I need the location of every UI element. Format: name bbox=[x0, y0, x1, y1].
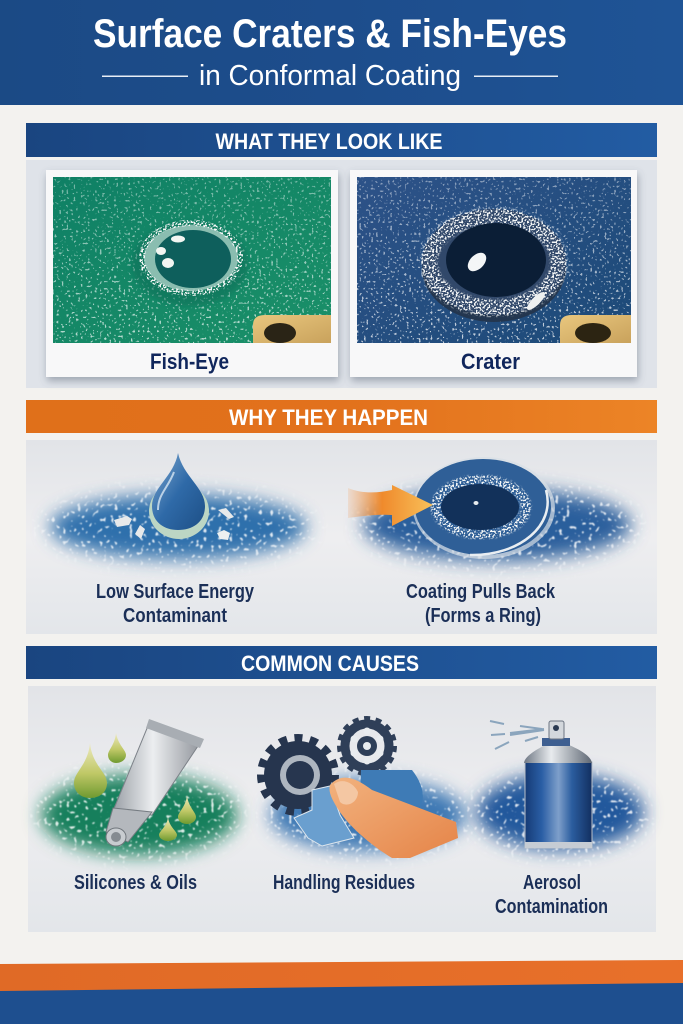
label: low surface energy contaminant: Low Surface Energy bbox=[96, 581, 255, 603]
section bar: what they look like bbox=[26, 123, 657, 157]
illustration: contaminant droplet bbox=[38, 453, 318, 574]
icon: gears and finger residue bbox=[261, 718, 458, 858]
illustration: coating pulls back ring bbox=[345, 457, 655, 580]
section bar: what they look like: WHAT THEY LOOK LIKE bbox=[216, 129, 442, 154]
panel: common causes bbox=[28, 686, 656, 932]
label: low surface energy contaminant bbox=[96, 581, 255, 627]
section bar: common causes bbox=[26, 646, 657, 679]
icon: silicone tube and oil drops bbox=[74, 719, 204, 846]
label: coating pulls back: (Forms a Ring) bbox=[425, 605, 541, 627]
label: handling residues: Handling Residues bbox=[273, 872, 415, 894]
speckled backgrounds bbox=[30, 750, 655, 870]
arrow bbox=[348, 485, 433, 526]
title: Surface Craters & Fish-Eyes bbox=[93, 12, 567, 56]
label: aerosol contamination: Aerosol bbox=[523, 872, 581, 894]
label: coating pulls back: Coating Pulls Back bbox=[406, 581, 556, 603]
footer bands bbox=[0, 960, 683, 1024]
photo card: crater bbox=[350, 170, 637, 377]
label: silicones and oils: Silicones & Oils bbox=[74, 872, 197, 894]
subtitle: in Conformal Coating bbox=[199, 60, 461, 92]
label: aerosol contamination bbox=[495, 872, 608, 918]
section bar: why they happen bbox=[26, 400, 657, 433]
panel: why they happen bbox=[26, 440, 657, 634]
label: low surface energy contaminant: Contaminant bbox=[123, 605, 227, 627]
label: coating pulls back bbox=[406, 581, 556, 627]
section bar: why they happen: WHY THEY HAPPEN bbox=[229, 405, 428, 430]
panel: what they look like bbox=[26, 160, 657, 388]
photo card: fish-eye bbox=[46, 170, 338, 377]
label: crater: Crater bbox=[461, 349, 520, 374]
label: fish-eye: Fish-Eye bbox=[150, 349, 229, 374]
section bar: common causes: COMMON CAUSES bbox=[241, 651, 419, 676]
header band bbox=[0, 0, 683, 105]
label: aerosol contamination: Contamination bbox=[495, 896, 608, 918]
icon: aerosol can bbox=[490, 721, 592, 848]
